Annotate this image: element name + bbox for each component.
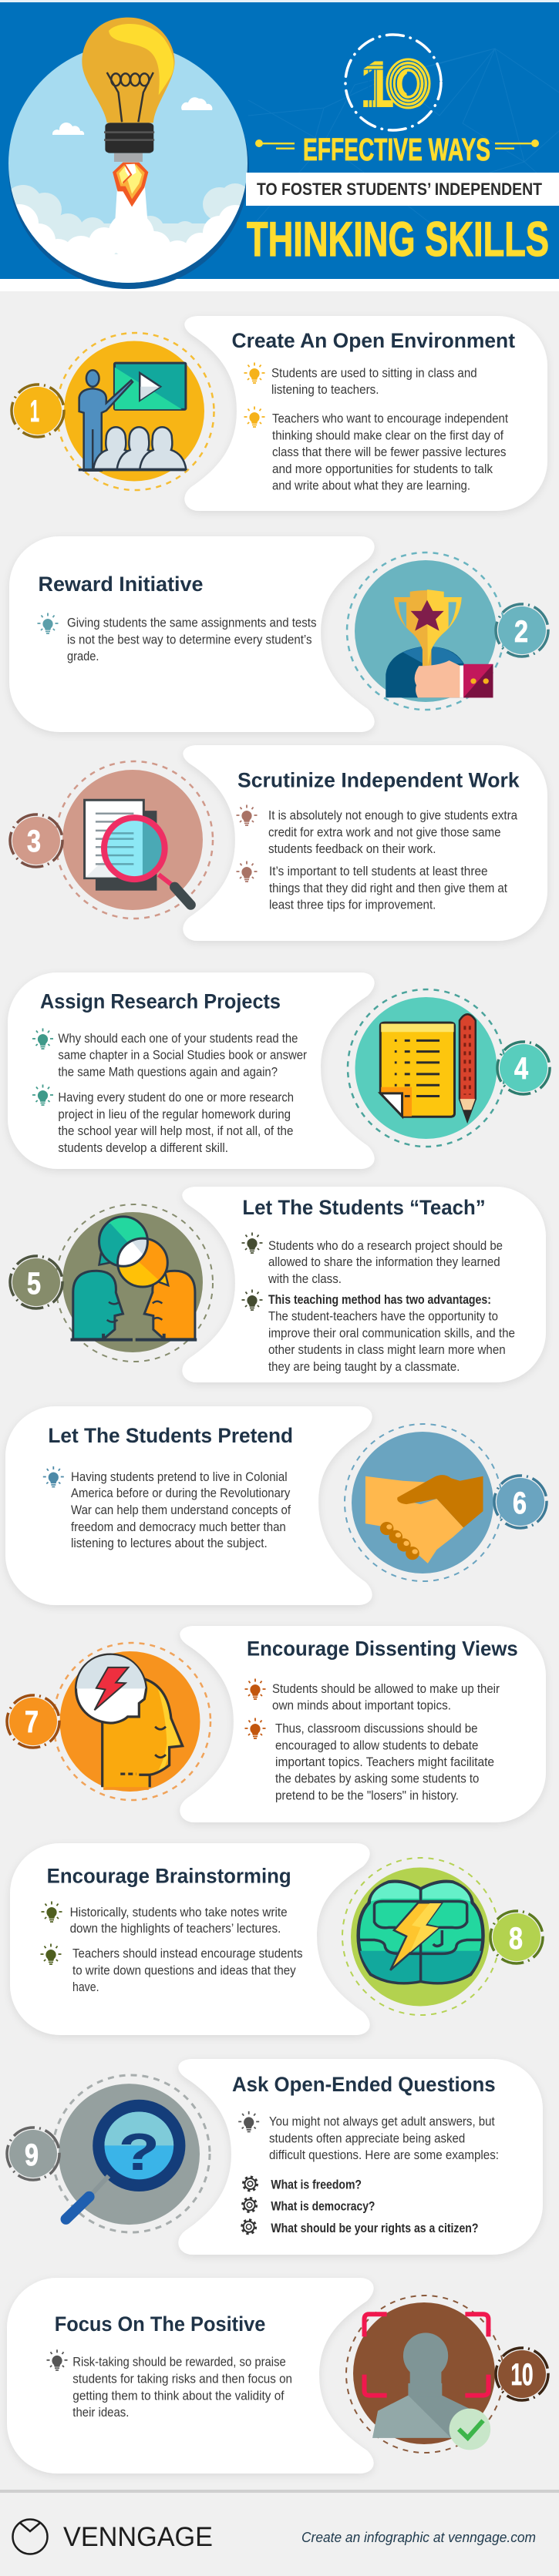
text block (67, 616, 316, 663)
badge: 3 (10, 814, 62, 867)
rocket bulb (82, 18, 175, 241)
text block: is not the best way to determine every student’s (67, 632, 311, 647)
text block: This teaching method has two advantages: (268, 1292, 491, 1307)
text block (271, 365, 508, 493)
text block: and more opportunities for students to talk (272, 462, 493, 476)
text block: project in lieu of the regular homework during (58, 1107, 291, 1121)
icon: tip bulbs (236, 804, 258, 882)
panel: 8 encourage brainstorming (10, 1843, 543, 2035)
text block: allowed to share the information they learned (268, 1254, 500, 1269)
illustration: checklist and pencil (348, 989, 505, 1147)
text block: Teachers who want to encourage independent (272, 411, 508, 426)
badge: 2 (496, 604, 548, 657)
text block: pretend to be the "losers" in history. (275, 1788, 459, 1802)
badge: 10 (496, 2348, 548, 2400)
text block (58, 1031, 307, 1155)
illustration: handshake (345, 1424, 502, 1581)
text block: to write down questions and ideas that they (72, 1963, 296, 1977)
text block: have. (72, 1980, 99, 1994)
text block: students often appreciate being asked (269, 2131, 465, 2145)
text block: listening to lectures about the subject. (71, 1536, 268, 1550)
text block: they are being taught by a classmate. (268, 1359, 460, 1374)
badge: 6: 6 (513, 1486, 527, 1520)
badge: 5 (10, 1256, 62, 1308)
panel: 4 assign research projects (8, 972, 550, 1169)
text block: their ideas. (72, 2405, 129, 2420)
icon: tip bulbs (245, 1678, 265, 1739)
text block: Having students pretend to live in Colonial (71, 1469, 288, 1484)
question list: What should be your rights as a citizen? (271, 2221, 478, 2235)
text block: least three tips for improvement. (269, 898, 436, 912)
text block: It is absolutely not enough to give students extra (268, 808, 517, 823)
venngage logo: VENNGAGE (63, 2522, 213, 2552)
illustration: magnifier on document (56, 761, 213, 919)
heading: Encourage Dissenting Views (247, 1637, 518, 1661)
illustration: verified person (346, 2296, 503, 2453)
illustration: trophy (347, 552, 504, 710)
text block: America before or during the Revolutionary (71, 1486, 291, 1500)
text block: class that there will be fewer passive lectures (272, 445, 506, 459)
badge: 4: 4 (514, 1052, 529, 1086)
badge: number 10: 10 (359, 48, 430, 122)
heading: Let The Students Pretend (48, 1424, 293, 1447)
text block: the same Math questions again and again? (58, 1064, 278, 1079)
text block: with the class. (268, 1271, 342, 1286)
panel: 9 ask open-ended questions (7, 2059, 543, 2255)
text block: Thus, classroom discussions should be (275, 1721, 478, 1736)
panel: 6 let the students pretend (5, 1406, 547, 1605)
text block: freedom and democracy much better than (71, 1520, 286, 1534)
badge: 2: 2 (514, 615, 528, 649)
panel: 10 focus on the positive (7, 2278, 548, 2474)
badge: 9: 9 (25, 2138, 39, 2172)
badge: 1: 1 (30, 395, 39, 428)
panel: 3 scrutinize independent work (10, 745, 547, 941)
question list: What is democracy? (271, 2199, 375, 2214)
badge: 7: 7 (25, 1705, 39, 1739)
text block: down the highlights of teachers’ lectures. (70, 1921, 281, 1936)
text block: Students who do a research project should be (268, 1238, 503, 1253)
icon: tip bulbs (40, 1902, 62, 1965)
text block: It’s important to tell students at least three (269, 864, 487, 878)
header illustration: rocket light bulb (0, 18, 254, 293)
badge: 7 (7, 1695, 59, 1748)
text block: important topics. Teachers might facilitate (275, 1755, 494, 1769)
text block (272, 1681, 500, 1802)
subtitle band (246, 173, 559, 206)
badge: 3: 3 (27, 825, 41, 858)
text block: getting them to think about the validity of (72, 2388, 285, 2403)
text block: students for taking risks and then focus on (72, 2372, 292, 2386)
illustration: question magnifier (52, 2075, 210, 2232)
icon: tip bulb (37, 613, 59, 634)
badge: 9 (7, 2128, 59, 2180)
text block: The student-teachers have the opportunity to (268, 1309, 498, 1324)
text block: thinking should make clear on the first day of (272, 428, 503, 442)
badge: 5: 5 (27, 1267, 41, 1301)
text block: Risk-taking should be rewarded, so praise (72, 2355, 286, 2369)
footer credit: Create an infographic at venngage.com (301, 2530, 536, 2545)
badge: number 10 (345, 35, 441, 130)
text block: Teachers should instead encourage students (72, 1946, 302, 1961)
text block (70, 1905, 302, 1994)
question list (271, 2177, 478, 2235)
text block: the school year will help most, if not all, of the (58, 1123, 293, 1138)
icon: tip bulbs (242, 1233, 262, 1311)
panel: 7 encourage dissenting views (7, 1626, 546, 1822)
icons: gears (242, 2177, 258, 2234)
illustration: head with lightning (53, 1643, 210, 1800)
panel: 1 create an open environment (12, 316, 547, 511)
heading: Assign Research Projects (40, 990, 281, 1013)
icon: tip bulb (46, 2349, 68, 2371)
footer (0, 2490, 559, 2554)
illustration: two heads talking (56, 1204, 213, 1362)
text block: listening to teachers. (271, 382, 379, 397)
badge: 1 (12, 385, 64, 437)
heading: Let The Students “Teach” (242, 1196, 486, 1219)
text block: and write about what they are learning. (272, 479, 470, 493)
badge: 6 (494, 1476, 547, 1528)
heading: Create An Open Environment (231, 329, 515, 352)
badge: 10: 10 (510, 2358, 534, 2392)
illustration: teacher and class (57, 333, 214, 490)
text block: Students should be allowed to make up their (272, 1681, 500, 1696)
text block: students develop a different skill. (58, 1140, 228, 1155)
header banner (0, 0, 559, 291)
heading: Scrutinize Independent Work (237, 768, 520, 791)
question list: What is freedom? (271, 2177, 362, 2191)
text block (268, 808, 517, 912)
text block: students feedback on their work. (268, 841, 436, 856)
text block (268, 1238, 515, 1374)
text block: You might not always get adult answers, but (269, 2114, 495, 2128)
text block: own minds about important topics. (272, 1698, 451, 1713)
text block: War can help them understand concepts of (71, 1503, 291, 1517)
text block: grade. (67, 649, 99, 663)
badge: 8: 8 (509, 1922, 523, 1956)
illustration: question magnifier: ? (118, 2122, 160, 2181)
text block: Giving students the same assignments and tests (67, 616, 316, 630)
panel: 5 let the students teach (10, 1187, 546, 1382)
text block: Students are used to sitting in class and (271, 365, 477, 380)
heading: Reward Initiative (39, 573, 204, 596)
badge: 4 (497, 1042, 550, 1094)
text block (71, 1469, 291, 1550)
text block: Having every student do one or more research (58, 1090, 294, 1105)
text block: the debates by asking some students to (275, 1772, 479, 1786)
icon: tip bulb (43, 1466, 64, 1487)
text block: improve their oral communication skills, and the (268, 1325, 515, 1340)
text block: encouraged to allow students to debate (275, 1738, 478, 1752)
heading: Encourage Brainstorming (47, 1865, 291, 1888)
text block: same chapter in a Social Studies book or answer (58, 1048, 307, 1063)
icon: tip bulb (238, 2111, 259, 2132)
heading: Focus On The Positive (55, 2312, 265, 2336)
venngage logo (12, 2520, 213, 2554)
badge: 8 (490, 1911, 543, 1963)
text block: things that they did right and then give them at (269, 881, 507, 895)
heading: Ask Open-Ended Questions (232, 2073, 496, 2096)
icon: tip bulbs (244, 362, 265, 428)
text block: credit for extra work and not give those same (268, 825, 501, 839)
text block: other students in class might learn more when (268, 1342, 506, 1357)
icon: tip bulbs (32, 1028, 53, 1106)
illustration: brain with lightning (342, 1858, 500, 2015)
text block (72, 2355, 292, 2420)
panel: 2 reward initiative (9, 536, 548, 732)
text block (269, 2114, 499, 2162)
text block: Why should each one of your students read the (58, 1031, 298, 1046)
text block: difficult questions. Here are some examples: (269, 2148, 499, 2162)
small clouds (52, 97, 212, 135)
text block: Historically, students who take notes write (70, 1905, 288, 1919)
